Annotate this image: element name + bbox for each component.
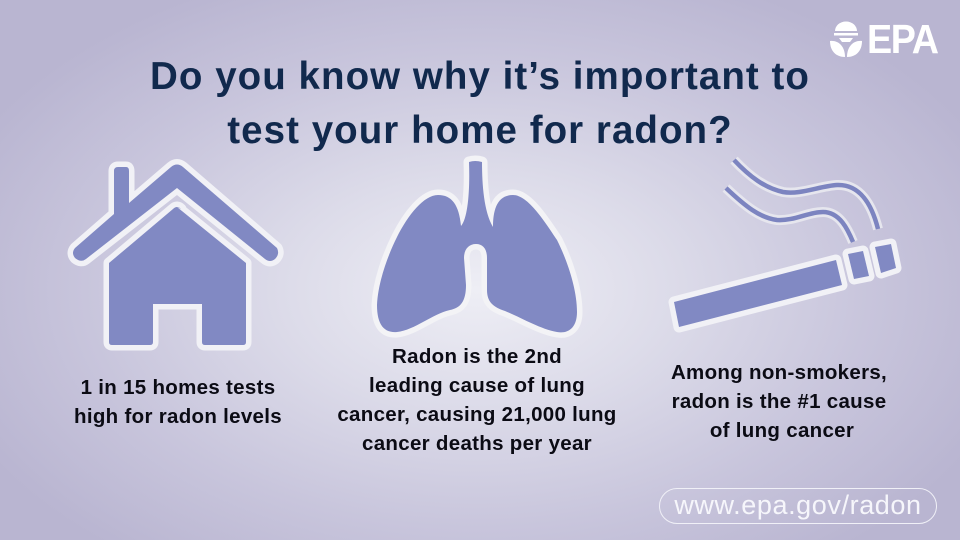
caption: homes: 1 in 15 homes tests [81,376,275,399]
caption: non-smokers: radon is the #1 cause [672,390,886,413]
smoke lines [726,160,878,242]
title [150,55,810,152]
cigarette body and filter [674,244,896,327]
caption: lung cancer: leading cause of lung [369,374,585,397]
caption: non-smokers: Among non-smokers, [671,361,887,384]
url pill [659,488,937,524]
caption: non-smokers [671,361,887,442]
caption: homes [74,376,282,428]
house roof and chimney [73,164,278,261]
caption: lung cancer [337,345,617,455]
house body [109,207,246,345]
title: Do you know why it’s important to [150,55,810,98]
icon: EPA flower [830,22,862,57]
caption: non-smokers: of lung cancer [710,419,854,442]
logo wordmark: EPA [867,16,938,62]
EPA logo [830,16,938,62]
caption: lung cancer: Radon is the 2nd [392,345,562,368]
caption: homes: high for radon levels [74,405,282,428]
caption: lung cancer: cancer deaths per year [362,432,592,455]
url text: www.epa.gov/radon [674,490,922,520]
title: test your home for radon? [227,109,733,152]
caption: lung cancer: cancer, causing 21,000 lung [337,403,617,426]
